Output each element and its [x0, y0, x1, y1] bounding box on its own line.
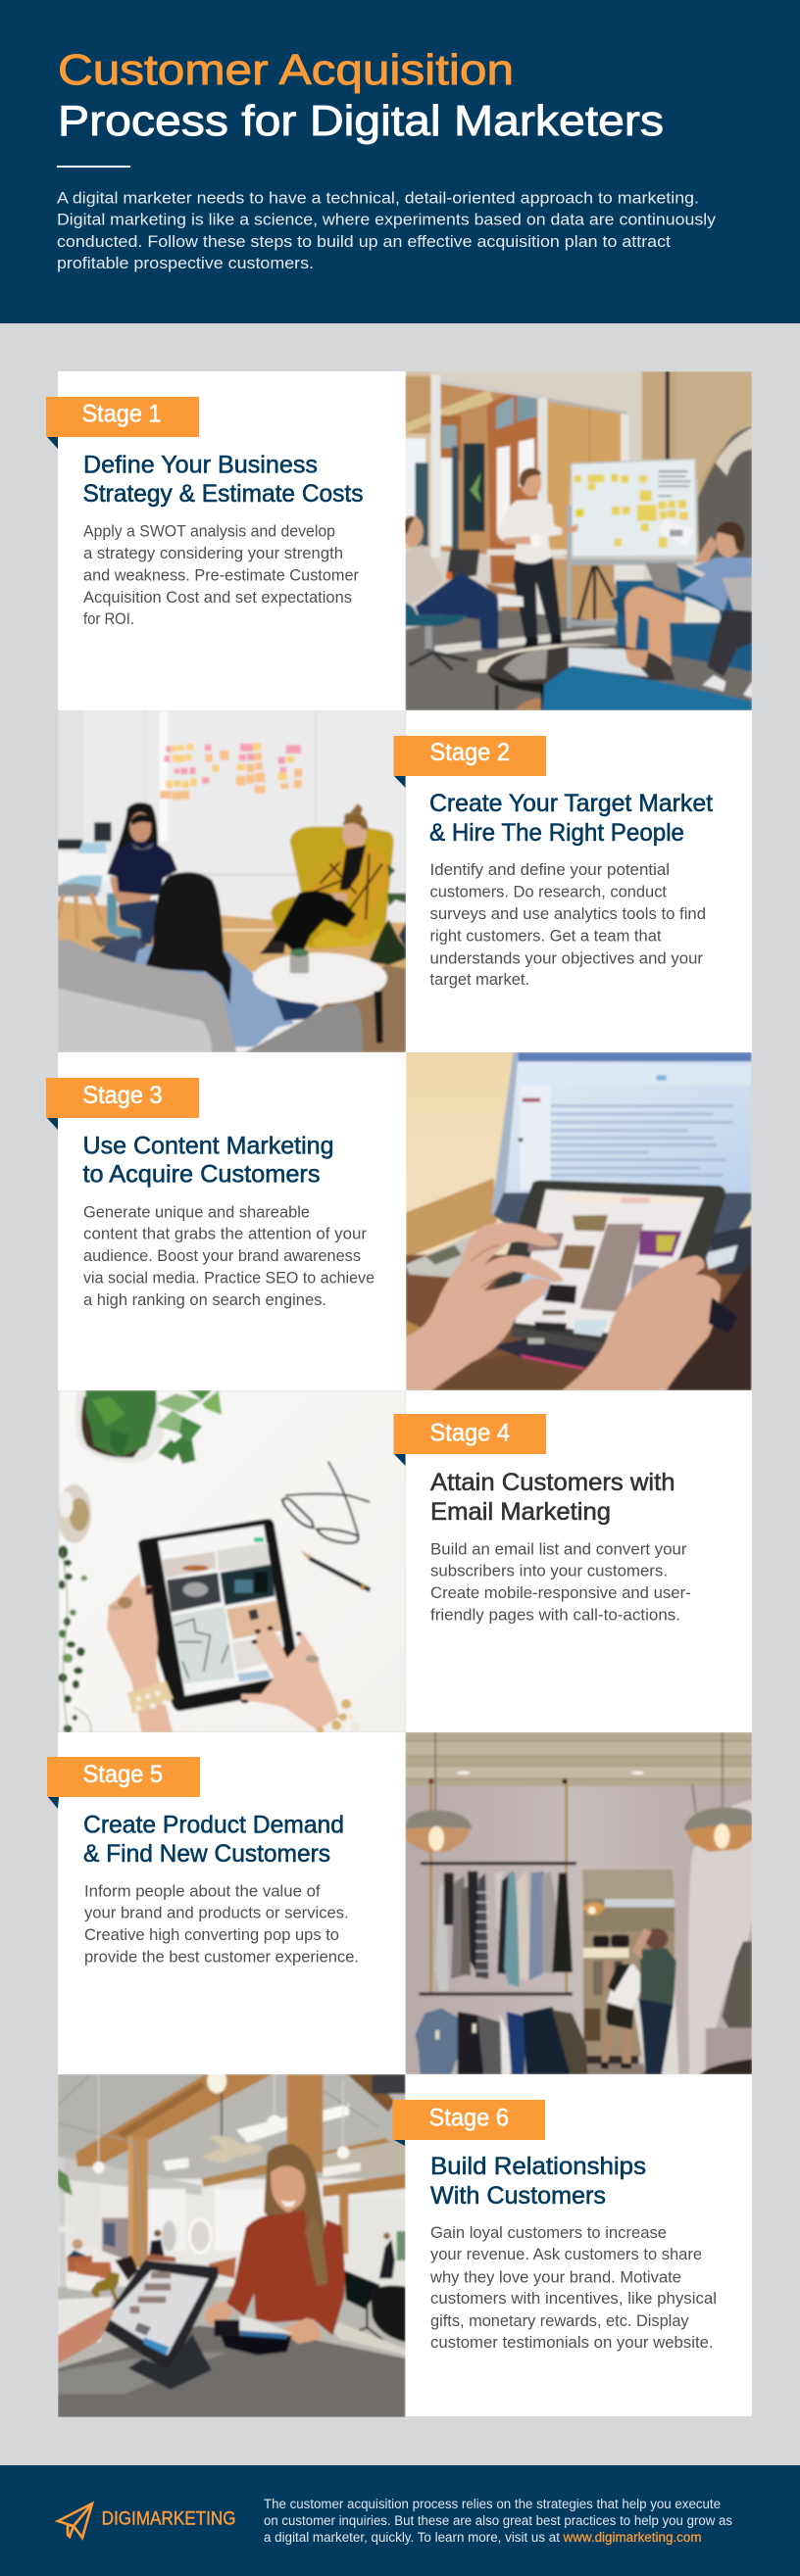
left hand [107, 1574, 173, 1732]
photo: clothing store [406, 1732, 752, 2074]
fan [202, 2136, 264, 2163]
stage 2 heading: & Hire The Right People [429, 819, 684, 847]
panel: stage 2 [58, 710, 752, 1052]
stage 2 heading [429, 790, 713, 847]
stage 3 badge: Stage 3 [82, 1082, 163, 1109]
photo: tablet on white desk [58, 1390, 406, 1732]
woman [264, 2144, 327, 2290]
glasses [285, 1462, 370, 1537]
stage 5 body [84, 1883, 359, 1967]
stage 6 body: customer testimonials on your website. [430, 2334, 714, 2352]
tablet POS [100, 2260, 219, 2370]
stage 3 body [83, 1203, 375, 1309]
stage 3 body: content that grabs the attention of your [83, 1226, 368, 1243]
panel: stage 3 [46, 1052, 751, 1390]
clothes lower [415, 2009, 471, 2074]
clothes upper [434, 1882, 448, 1992]
panel: stage 6 [56, 2068, 752, 2417]
stage 2 badge: Stage 2 [429, 739, 510, 766]
stage 1 heading: Define Your Business [83, 451, 318, 478]
stage 2 body: right customers. Get a team that [429, 928, 662, 946]
stage 6 body: why they love your brand. Motivate [429, 2268, 681, 2286]
left hand [406, 1223, 564, 1390]
sofa [58, 940, 236, 1052]
stage 2 body: customers. Do research, conduct [429, 884, 667, 901]
stage 2 body: target market. [429, 971, 529, 989]
stage 3 heading [82, 1133, 333, 1189]
footer text: www.digimarketing.com [563, 2530, 702, 2545]
woman left [117, 802, 158, 857]
panel: stage 5 [47, 1732, 752, 2074]
stage 4 body: Build an email list and convert your [430, 1540, 687, 1558]
rug [320, 965, 406, 1052]
photo: team at whiteboard [406, 371, 752, 710]
right hand [562, 1255, 721, 1390]
stage 5 heading [83, 1811, 344, 1868]
intro text: conducted. Follow these steps to build up an effective acquisition plan to attract [57, 233, 671, 251]
lounge chairs [67, 2256, 92, 2272]
stage 6 badge [392, 2100, 545, 2146]
title: Customer Acquisition [58, 46, 514, 94]
stage 1 body [83, 523, 359, 628]
stage 4 body: subscribers into your customers. [430, 1562, 668, 1580]
glass jar [57, 1484, 91, 1543]
stage 6 heading: With Customers [430, 2182, 606, 2210]
stage 1 body: for ROI. [83, 610, 134, 628]
stage 3 body: Generate unique and shareable [83, 1203, 310, 1221]
beams [75, 2074, 273, 2166]
pendant lights [98, 2074, 99, 2163]
intro text: Digital marketing is like a science, where experiments based on data are continuously [57, 212, 717, 229]
stage 1 heading: Strategy & Estimate Costs [82, 480, 363, 508]
stage 6 body: customers with incentives, like physical [430, 2290, 717, 2308]
card reader [221, 2336, 292, 2356]
icon: paper plane logo [58, 2503, 92, 2538]
stage 4 heading [430, 1469, 675, 1526]
plant pot [75, 1390, 165, 1463]
counter left white [58, 2297, 114, 2342]
glass table [487, 644, 670, 690]
stage 4 badge: Stage 4 [429, 1419, 510, 1446]
stage 5 body: provide the best customer experience. [84, 1949, 359, 1967]
stage 5 body: Creative high converting pop ups to [84, 1926, 339, 1944]
mirror [580, 1867, 677, 2074]
stage 2 badge [394, 736, 546, 788]
vines [58, 1545, 87, 1732]
stage 6 body: Gain loyal customers to increase [430, 2224, 667, 2242]
tablet [487, 1181, 725, 1346]
stage 2 body: surveys and use analytics tools to find [429, 905, 706, 923]
photo: hands on tablet [406, 1052, 751, 1390]
stage 3 body: a high ranking on search engines. [83, 1291, 326, 1309]
stage 5 body: your brand and products or services. [84, 1905, 349, 1922]
stage 4 badge [394, 1414, 546, 1466]
stage 6 body: gifts, monetary rewards, etc. Display [430, 2312, 689, 2330]
stage 2 body [429, 861, 706, 989]
hand left [58, 2307, 114, 2363]
stage 3 heading: to Acquire Customers [82, 1161, 320, 1189]
stage 1 body: Acquisition Cost and set expectations [83, 589, 352, 607]
lamps [406, 1808, 752, 1853]
stage 2 heading: Create Your Target Market [429, 790, 713, 817]
people in mirror [606, 1965, 645, 2010]
yellow chair [271, 827, 393, 948]
stage 6 heading [430, 2153, 646, 2210]
intro text: A digital marketer needs to have a technical, detail-oriented approach to marketing. [57, 190, 699, 208]
panel: stage 1 [46, 371, 752, 710]
table [253, 952, 387, 1003]
stage 6 body [429, 2224, 717, 2352]
stage 5 badge [47, 1757, 200, 1809]
pen [309, 1556, 371, 1592]
man left [406, 545, 443, 605]
curtain [688, 1799, 752, 2074]
background people [149, 2239, 164, 2256]
counter [58, 2326, 406, 2417]
stage 5 badge: Stage 5 [82, 1761, 163, 1788]
stage 1 badge [46, 397, 199, 449]
back woman [90, 937, 117, 948]
woman yellow [344, 803, 368, 831]
stage 6 body: your revenue. Ask customers to share [430, 2246, 702, 2263]
stage 4 body [430, 1540, 691, 1625]
plant [370, 919, 406, 965]
stage 1 heading [82, 451, 363, 508]
stage 4 body: friendly pages with call-to-actions. [430, 1607, 680, 1625]
stage 3 body: audience. Boost your brand awareness [83, 1247, 361, 1265]
stage 2 body: Identify and define your potential [429, 861, 670, 879]
stage 1 badge: Stage 1 [82, 400, 161, 427]
man standing [513, 558, 562, 644]
stage 4 heading: Attain Customers with [430, 1469, 675, 1496]
intro text [57, 190, 717, 272]
stage 5 heading: Create Product Demand [83, 1811, 344, 1838]
footer text [264, 2497, 732, 2545]
brass horse [81, 2272, 120, 2308]
photo: women meeting [58, 710, 406, 1052]
stage 1 body: Apply a SWOT analysis and develop [83, 523, 335, 541]
title: Process for Digital Marketers [58, 97, 664, 145]
title [58, 46, 664, 145]
stage 6 badge: Stage 6 [429, 2105, 509, 2132]
stage 5 heading: & Find New Customers [83, 1840, 330, 1868]
sofa right [616, 565, 752, 672]
panel: stage 4 [57, 1390, 752, 1734]
stage 2 body: understands your objectives and your [429, 949, 704, 967]
footer text: on customer inquiries. But these are also great best practices to help you grow as [264, 2513, 732, 2528]
stage 3 body: via social media. Practice SEO to achieve [83, 1269, 375, 1287]
tablet [138, 1519, 295, 1711]
logo wordmark: DIGIMARKETING [102, 2509, 236, 2530]
stage 5 body: Inform people about the value of [84, 1883, 321, 1901]
footer text: a digital marketer, quickly. To learn more, visit us at [264, 2530, 560, 2545]
footer band [0, 2465, 800, 2576]
stage 3 heading: Use Content Marketing [82, 1133, 333, 1160]
photo: woman at checkout [58, 2074, 406, 2417]
foreground blue sofa [542, 666, 752, 710]
stage 4 body: Create mobile-responsive and user- [430, 1584, 691, 1602]
stage 3 badge [46, 1078, 199, 1130]
header band [0, 0, 800, 323]
intro text: profitable prospective customers. [57, 255, 314, 272]
stage 1 body: a strategy considering your strength [83, 545, 343, 562]
stage 4 heading: Email Marketing [430, 1498, 611, 1526]
right hand [241, 1630, 339, 1730]
stage 1 body: and weakness. Pre-estimate Customer [83, 566, 359, 584]
footer text: The customer acquisition process relies on the strategies that help you execute [264, 2497, 721, 2511]
stage 6 heading: Build Relationships [430, 2153, 646, 2180]
